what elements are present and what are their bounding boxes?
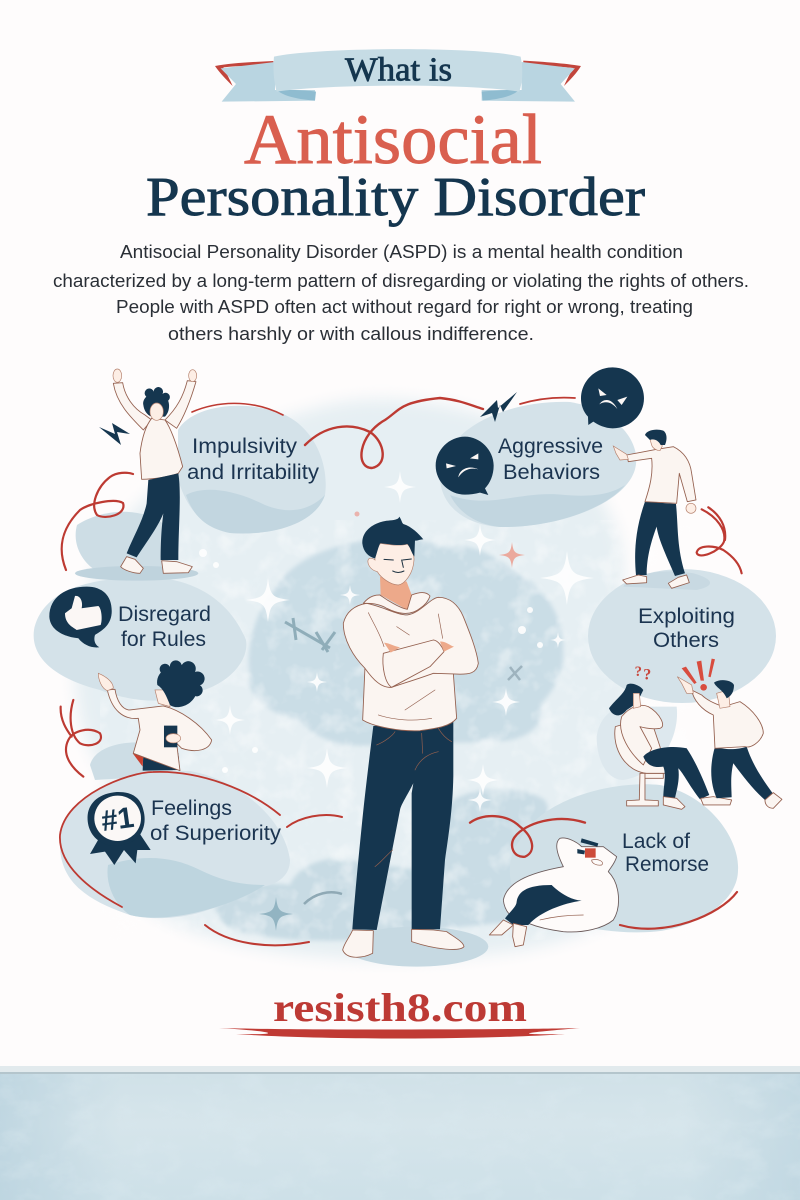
figure: man with raised arms [75,369,198,581]
panel: Feelings of Superiority [60,771,290,918]
confusion marks: ? [643,666,651,683]
figure: seated woman on chair [597,664,732,809]
head [368,543,414,585]
red outline arc [60,772,280,907]
title: Antisocial: Antisocial [244,101,542,179]
label: Lack of [622,830,690,853]
label: Impulsivity [192,435,298,458]
icon: angry speech bubble lower [436,437,494,495]
neck [380,577,412,610]
icon: number one ribbon badge [88,792,151,865]
sparkles [199,471,594,812]
panel: Lack of Remorse [510,784,738,932]
face details [384,559,411,573]
label [638,605,735,652]
lower right cloud [430,789,551,930]
torso and arms [343,597,478,687]
icon: lightning bolt left [99,423,130,445]
shoes [343,930,373,957]
label [118,603,211,651]
icon: thumbs up bubble [49,587,112,647]
panel: Disregard for Rules [34,512,246,780]
lower left cloud [213,859,420,941]
icon: number one ribbon badge: #1 [99,801,136,838]
mottled texture [100,520,690,940]
panel: Aggressive Behaviors [440,402,636,527]
hood [363,593,430,613]
website: resisth8.com: resisth8.com [273,985,527,1030]
floor band [0,1066,800,1200]
trousers [352,720,453,930]
label: Exploiting [638,605,735,628]
watercolor backdrop cloud [75,399,690,960]
hands [384,642,454,653]
intro paragraph: People with ASPD often act without regard for right or wrong, treating [116,297,693,317]
small cloud behind coffee figure [90,742,175,780]
intro paragraph: Antisocial Personality Disorder (ASPD) is a mental health condition [120,242,683,262]
label [187,435,320,484]
intro paragraph: characterized by a long-term pattern of disregarding or violating the rights of others. [53,271,749,291]
intro paragraph [53,242,749,344]
panel: Impulsivity and Irritability [178,406,326,533]
label: Aggressive [498,435,603,458]
label: of Superiority [150,822,282,845]
hair [362,517,423,558]
confusion marks: ? [635,664,642,680]
label: for Rules [121,628,206,651]
accents in backdrop [259,512,525,931]
label: Feelings [151,797,232,820]
red squiggles [61,398,742,945]
label: and Irritability [187,461,320,484]
label: Others [653,629,719,652]
ground shadow [345,927,488,967]
label: Remorse [625,853,709,876]
icon: angry speech bubble upper [581,367,644,428]
text: What is: What is [345,52,452,89]
title: Personality Disorder: Personality Disorder [146,166,645,227]
panel: Exploiting Others [588,569,776,703]
confusion marks [635,664,651,683]
label [150,797,282,845]
intro paragraph: others harshly or with callous indifference. [168,324,534,344]
figure: person with coffee cup [98,660,212,771]
banner: What is [215,49,581,102]
label [498,435,603,484]
sweater body [363,667,457,731]
label [622,830,709,876]
figure: aggressive pointing man [613,430,710,590]
figure: pointing man with exclamation [677,659,782,808]
icon: lightning bolt right [480,392,517,422]
website underline swoosh [219,1028,580,1038]
red arc [620,892,737,929]
central figure: man with crossed arms [343,517,488,967]
crossed forearm [383,640,444,687]
label: Behaviors [503,461,600,484]
figure: man reclining on beanbag [489,838,619,947]
label: Disregard [118,603,211,626]
